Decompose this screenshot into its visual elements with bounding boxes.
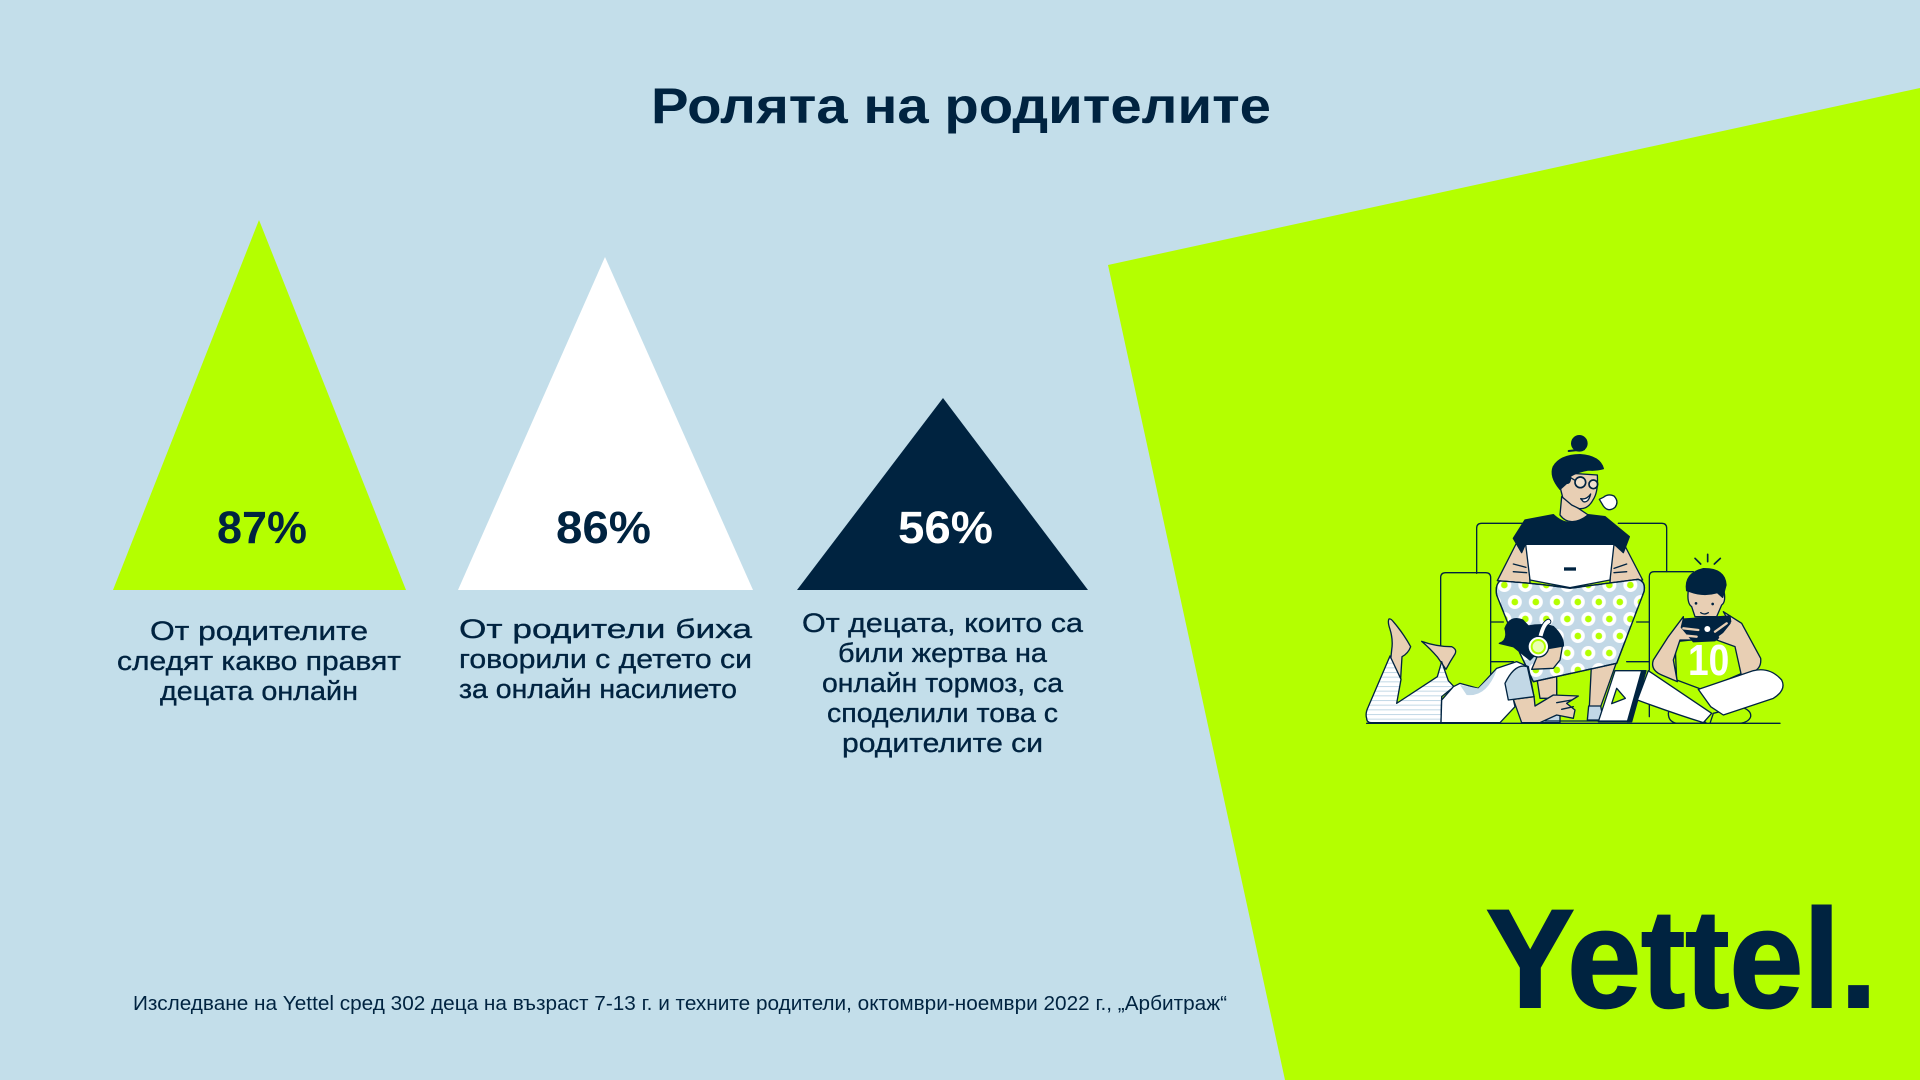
value 87%: 87% (217, 502, 307, 553)
caption 56%: От децата, които са (802, 608, 1083, 638)
boy arms (1653, 617, 1693, 682)
arms (1497, 544, 1530, 583)
boy shirt (1675, 635, 1742, 690)
navy triangle (797, 398, 1088, 590)
caption 87%: От родителите (150, 616, 368, 646)
laptop (1526, 544, 1614, 588)
tablet on floor (1598, 671, 1646, 722)
phone (1681, 616, 1731, 642)
value 56%: 56% (898, 502, 993, 553)
boy feet (1668, 707, 1707, 723)
illustration: family on a sofa (1365, 435, 1784, 724)
glasses (1575, 477, 1586, 488)
source note: Изследване на Yettel сред 302 деца на възраст 7-13 г. и техните родители, октомври-ноември 2022 г., „Арбитраж“ (133, 993, 1227, 1015)
girl feet (1388, 619, 1411, 678)
sparks (1695, 554, 1720, 564)
caption 56% (802, 608, 1083, 758)
boy head (1688, 588, 1725, 617)
girl (1366, 619, 1578, 723)
pyjamas (1366, 656, 1454, 723)
caption 86%: говорили с детето си (459, 644, 752, 674)
panel: 87% (113, 220, 406, 706)
green corner shape (1108, 88, 1920, 1080)
caption 87%: следят какво правят (117, 646, 401, 676)
girl hair (1499, 619, 1563, 660)
girl keyboard (1535, 712, 1560, 723)
face (1560, 473, 1598, 509)
caption 86%: От родители биха (459, 614, 752, 644)
shirt (1513, 515, 1629, 553)
shirt number 10: 10 (1688, 636, 1729, 685)
girl arm (1513, 695, 1578, 723)
green triangle (113, 220, 406, 590)
caption 87% (117, 616, 401, 706)
boy (1637, 554, 1783, 723)
caption 56%: родителите си (842, 728, 1043, 758)
neck (1560, 497, 1588, 522)
sofa (1441, 523, 1693, 717)
caption 87%: децата онлайн (160, 676, 358, 706)
speech bubble (1599, 495, 1617, 510)
caption 56%: споделили това с (827, 698, 1058, 728)
caption 56%: онлайн тормоз, са (822, 668, 1063, 698)
logo: Yettel: Yettel. (1486, 880, 1877, 1037)
girl top (1441, 662, 1534, 723)
panel: 86% (458, 257, 753, 704)
boy legs (1698, 670, 1783, 715)
floor line (1367, 721, 1780, 723)
girl face (1532, 645, 1563, 669)
headphones (1540, 622, 1548, 638)
white triangle (458, 257, 753, 590)
legs (1589, 660, 1617, 707)
hair (1552, 455, 1603, 489)
panel: 56% (797, 398, 1088, 758)
caption 56%: били жертва на (838, 638, 1047, 668)
caption 86% (459, 614, 752, 704)
skirt (1496, 579, 1644, 682)
value 86%: 86% (556, 502, 651, 553)
title: Ролята на родителите (651, 78, 1271, 134)
woman (1496, 436, 1644, 720)
caption 86%: за онлайн насилието (459, 674, 737, 704)
